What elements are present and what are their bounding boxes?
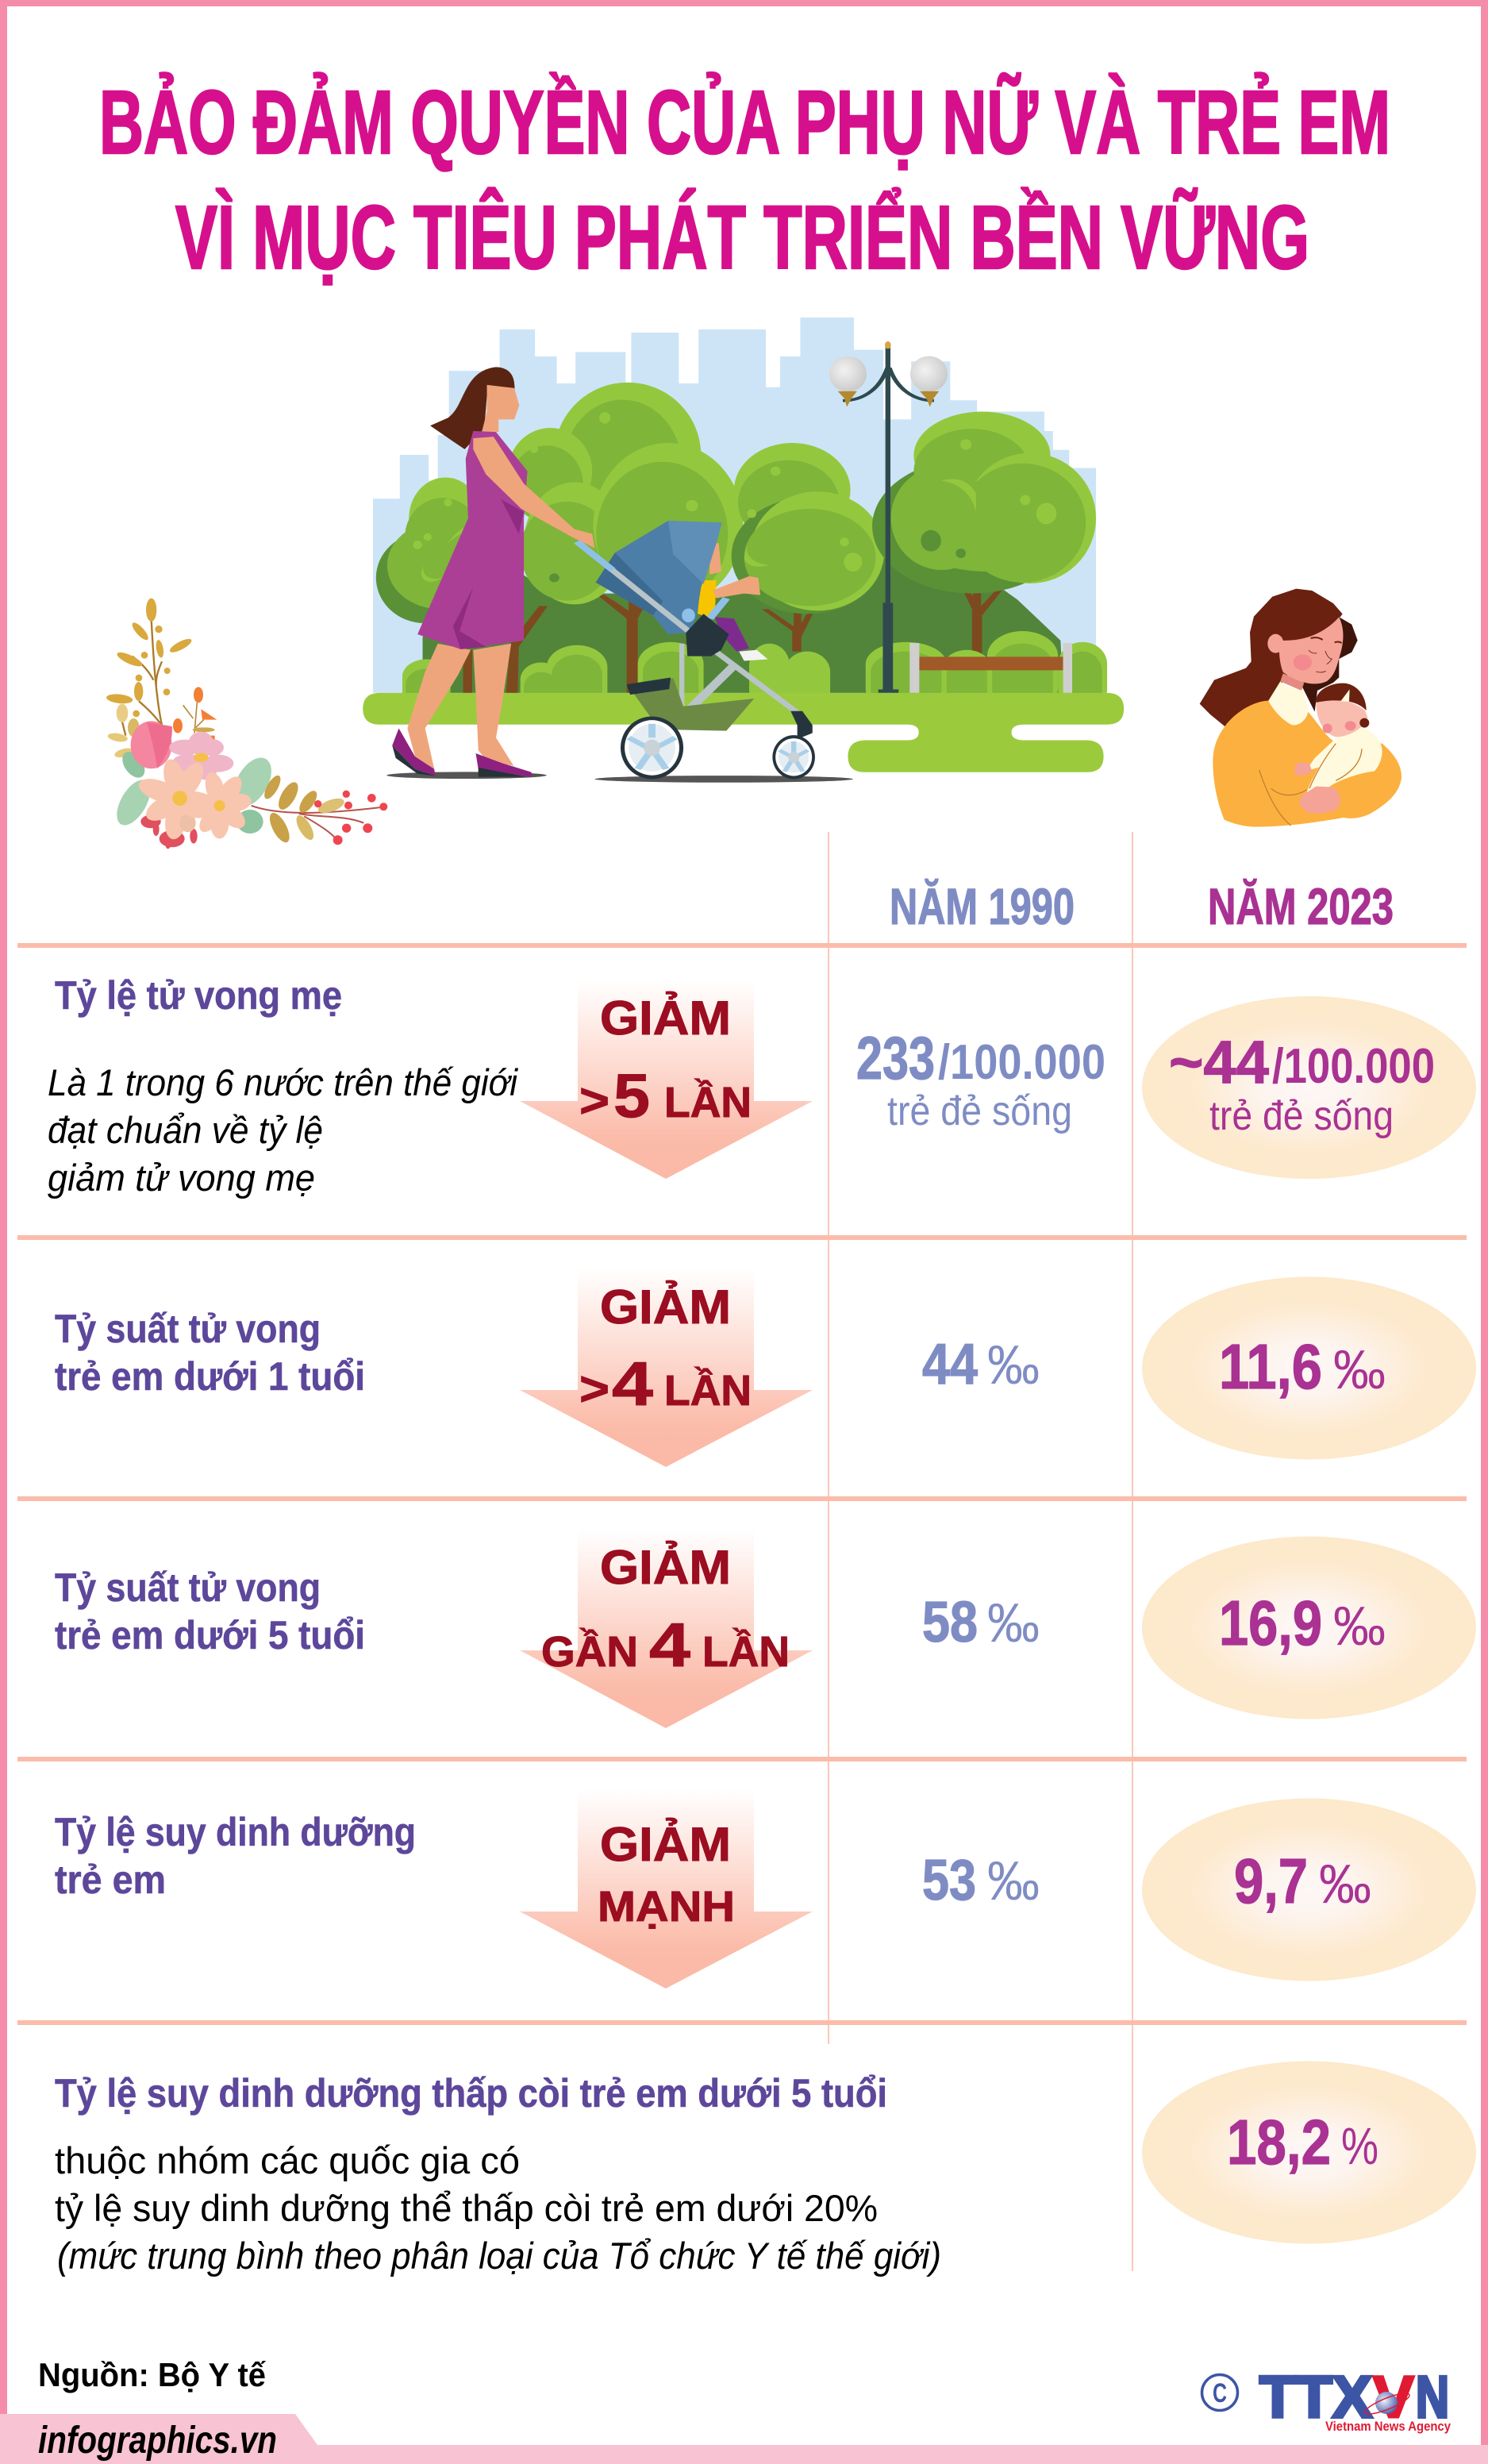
row 2: arrow: GIẢM (600, 1280, 731, 1334)
row 2: under-1 mortality label: Tỷ suất tử vong (55, 1307, 321, 1351)
row 3: arrow (520, 1530, 813, 1728)
row 1: maternal mortality label: đạt chuẩn về tỷ lệ (48, 1109, 323, 1151)
header: year 1990: NĂM 1990 (890, 878, 1075, 935)
row 1: maternal mortality label: Tỷ lệ tử vong mẹ (55, 973, 342, 1018)
row 2: value 1990: ‰ (987, 1334, 1040, 1396)
row 2: value 2023: ‰ (1333, 1338, 1386, 1400)
row 4: arrow: GIẢM (600, 1818, 731, 1871)
row 4: value 2023 (1142, 1799, 1476, 1981)
row 3: arrow: GẦN (541, 1628, 638, 1676)
row 4: value 1990: 53 (922, 1849, 976, 1912)
row 1: arrow: > (579, 1074, 609, 1127)
illustration: mother holding baby (1200, 589, 1401, 827)
row 5: stunting text (55, 2071, 941, 2277)
icon: street lamp (829, 341, 948, 693)
shadows (386, 772, 853, 783)
row 3: value 2023: ‰ (1333, 1595, 1386, 1657)
row 1: value 1990 (856, 1025, 1105, 1134)
row 1: value 2023 (1142, 996, 1476, 1179)
row 1: maternal mortality label (48, 973, 518, 1199)
row 3: arrow: GIẢM (600, 1541, 731, 1594)
row 1: value 1990: /100.000 (938, 1035, 1105, 1090)
row 1: maternal mortality label: giảm tử vong mẹ (48, 1157, 315, 1199)
row 1: value 1990: trẻ đẻ sống (887, 1088, 1072, 1134)
logo: TTXVN: C (1213, 2378, 1227, 2408)
row 1: arrow: LẦN (664, 1079, 752, 1126)
row 5: stunting text: thuộc nhóm các quốc gia có (55, 2139, 520, 2181)
website: infographics.vn (38, 2420, 277, 2462)
row 5: value 2023: 18,2 (1227, 2107, 1331, 2177)
row 1: arrow (520, 980, 813, 1179)
row 3: arrow: 4 (649, 1610, 690, 1680)
row 5: stunting text: (mức trung bình theo phân loại của Tổ chức Y tế thế giới) (57, 2235, 941, 2277)
logo: TTXVN: N (1416, 2364, 1449, 2430)
row 3: under-5 mortality label: trẻ em dưới 5 tuổi (55, 1613, 365, 1657)
row 2: arrow: > (579, 1362, 609, 1415)
row 2: value 2023 (1142, 1276, 1476, 1459)
row 4: value 1990 (922, 1849, 1040, 1912)
row 3: arrow: LẦN (702, 1628, 790, 1676)
row 3: value 1990: 58 (922, 1591, 978, 1654)
row 2: arrow: 4 (612, 1349, 653, 1419)
header: year 2023: NĂM 2023 (1208, 878, 1394, 935)
row 2: value 1990: 44 (922, 1333, 978, 1396)
row 1: value 2023: trẻ đẻ sống (1209, 1093, 1394, 1139)
logo: TTXVN: TTX (1259, 2364, 1372, 2430)
row 1: value 2023: /100.000 (1272, 1039, 1435, 1094)
figure: stroller with child (577, 521, 815, 779)
row 5: value 2023 (1142, 2061, 1476, 2243)
row 2: value 1990 (922, 1333, 1040, 1396)
row 5: stunting text: tỷ lệ suy dinh dưỡng thể thấp còi trẻ em dưới 20% (55, 2187, 878, 2229)
row 5: value 2023: % (1341, 2116, 1378, 2175)
row 3: under-5 mortality label: Tỷ suất tử vong (55, 1565, 321, 1610)
row 1: arrow: 5 (613, 1061, 650, 1130)
row 2: arrow (520, 1269, 813, 1467)
logo: TTXVN (1202, 2364, 1451, 2434)
row 3: value 1990: ‰ (987, 1592, 1040, 1654)
row 4: arrow: MẠNH (598, 1883, 735, 1931)
source: Nguồn: Bộ Y tế (38, 2356, 267, 2393)
title (99, 72, 1390, 287)
row 4: malnutrition label: Tỷ lệ suy dinh dưỡng (55, 1810, 416, 1854)
row 5: stunting text: Tỷ lệ suy dinh dưỡng thấp còi trẻ em dưới 5 tuổi (55, 2071, 887, 2116)
row 2: under-1 mortality label (55, 1307, 365, 1399)
row 1: value 2023: ~44 (1169, 1029, 1269, 1096)
row 2: value 2023: 11,6 (1219, 1331, 1322, 1402)
table grid lines (17, 832, 1467, 2271)
ground (363, 693, 1124, 772)
row 1: arrow: GIẢM (600, 991, 731, 1045)
row 4: value 1990: ‰ (987, 1850, 1040, 1912)
row 2: under-1 mortality label: trẻ em dưới 1 tuổi (55, 1354, 365, 1399)
row 3: value 2023 (1142, 1537, 1476, 1719)
row 2: arrow: LẦN (664, 1367, 752, 1415)
illustration: mother with stroller in park (363, 318, 1124, 783)
row 3: under-5 mortality label (55, 1565, 365, 1657)
row 4: arrow (520, 1789, 813, 1989)
row 3: value 1990 (922, 1591, 1040, 1654)
row 1: maternal mortality label: Là 1 trong 6 nước trên thế giới (48, 1061, 518, 1103)
row 1: value 1990: 233 (856, 1025, 935, 1092)
logo: TTXVN: Vietnam News Agency (1325, 2419, 1451, 2434)
logo: TTXVN: V (1373, 2364, 1414, 2430)
icon: bench (909, 643, 1072, 693)
row 4: malnutrition label: trẻ em (55, 1858, 166, 1902)
row 3: value 2023: 16,9 (1219, 1588, 1322, 1658)
figure: woman (392, 367, 594, 777)
footer band (0, 2414, 1488, 2464)
row 4: malnutrition label (55, 1810, 416, 1902)
row 4: value 2023: 9,7 (1234, 1846, 1308, 1916)
row 4: value 2023: ‰ (1319, 1853, 1371, 1915)
illustration: flowers (106, 599, 387, 849)
